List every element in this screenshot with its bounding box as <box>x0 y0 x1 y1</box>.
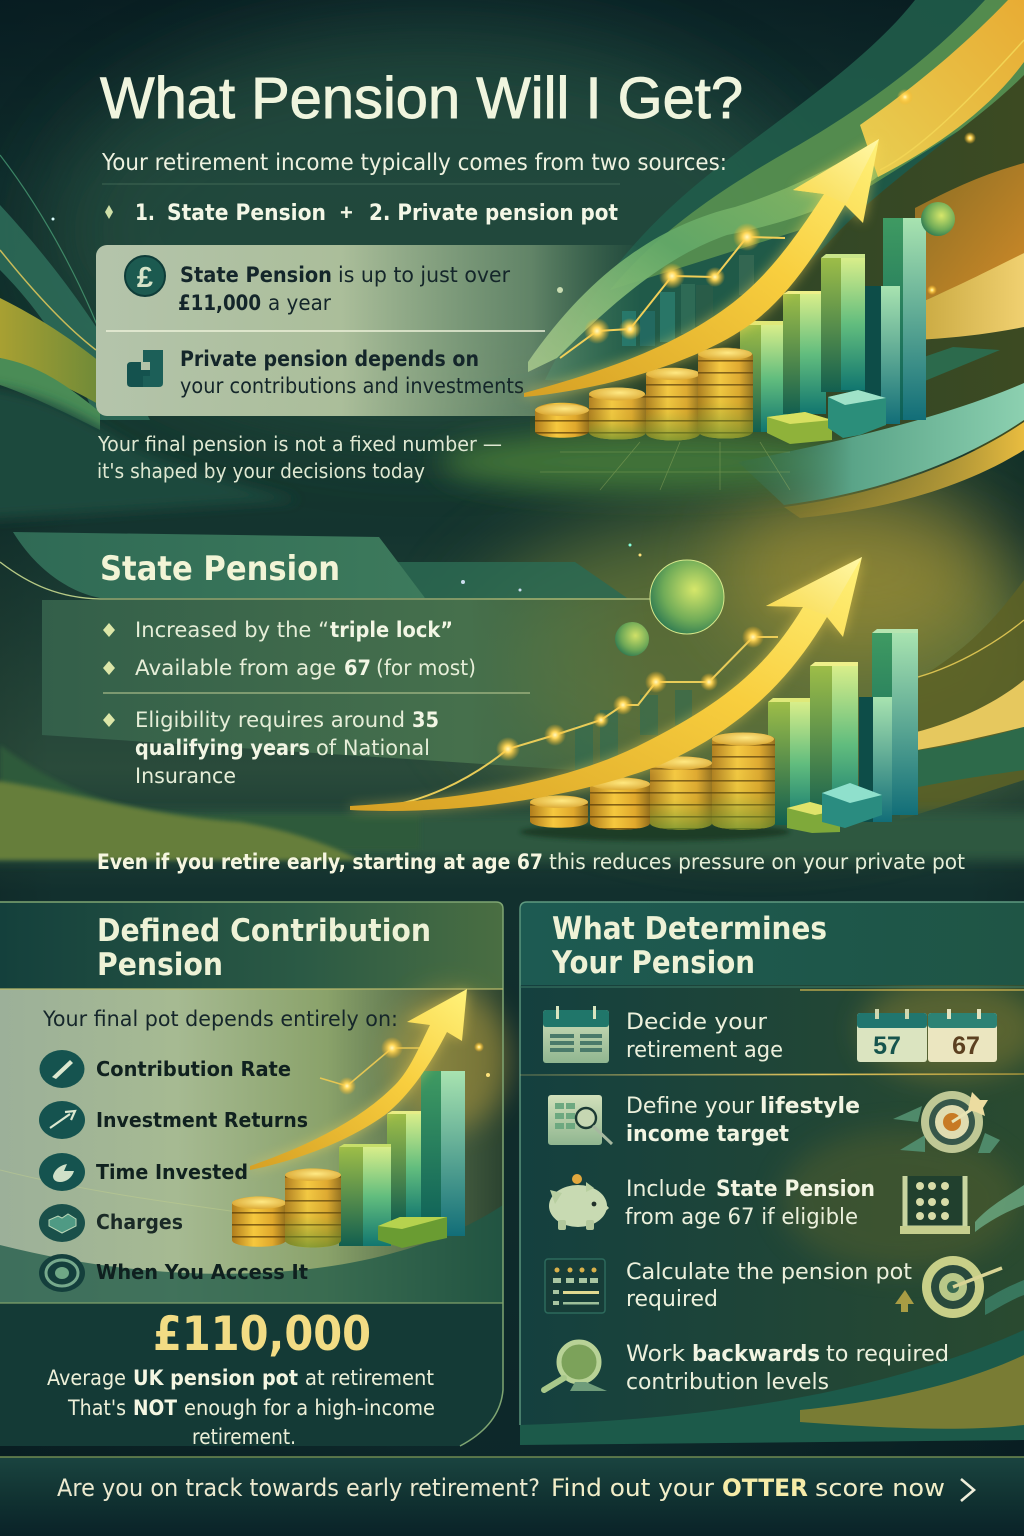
text: average pot explanation: enough for a high-income <box>184 1396 435 1420</box>
chart: defined contribution bars, coins and arrow <box>232 989 467 1248</box>
two sources line: + <box>340 200 353 225</box>
factor: when you access it: When You Access It <box>96 1260 308 1284</box>
chart: middle growth bars, coins and arrow <box>350 557 918 833</box>
footer call to action: Find out your <box>551 1474 714 1502</box>
icon: glass spheres <box>615 560 724 656</box>
icon: calculator grid <box>545 1259 605 1313</box>
row: pot required <box>545 1256 1024 1318</box>
row: work backwards <box>544 1342 949 1395</box>
row: state pension: from age 67 if eligible <box>625 1205 858 1230</box>
decorative waves: top section <box>0 0 1024 520</box>
row: lifestyle target: income target <box>626 1122 789 1147</box>
factor: contribution rate <box>40 1050 291 1088</box>
row: pot required: Calculate the pension pot <box>626 1260 912 1285</box>
text: state pension takeaway <box>97 850 965 874</box>
small sphere <box>921 202 955 236</box>
text: state pension takeaway: Even if you retire early, starting at age 67 <box>97 850 543 874</box>
icon: rising arrow <box>250 989 467 1170</box>
panel: defined contribution pension <box>0 902 510 1449</box>
icon: small background bars <box>622 255 754 346</box>
text: fixed number note <box>97 432 502 483</box>
row: state pension: Include <box>626 1177 706 1202</box>
two sources line: 1. <box>135 201 155 226</box>
text: state pension amount: State Pension <box>180 263 332 287</box>
footer call to action: Are you on track towards early retirement? <box>57 1474 540 1502</box>
text: fixed number note: it's shaped by your decisions today <box>97 459 425 483</box>
heading: Defined Contribution <box>97 913 431 949</box>
heading: What Determines <box>552 911 827 947</box>
icon: private pension pieces <box>127 350 163 387</box>
icon: age calendars 57 and 67: 67 <box>952 1032 980 1060</box>
row: work backwards: to required <box>826 1342 949 1367</box>
decorative sparkles <box>52 89 976 1077</box>
factor: investment returns: Investment Returns <box>96 1108 308 1132</box>
icon: abacus <box>900 1176 970 1234</box>
heading: State Pension <box>100 549 340 589</box>
footer call to action <box>0 1457 1024 1536</box>
bars <box>768 629 918 825</box>
row: lifestyle target: Define your <box>626 1094 755 1119</box>
coins <box>535 348 753 440</box>
text: average pot explanation <box>47 1366 435 1449</box>
heading <box>551 911 827 981</box>
icon: pound coin <box>125 256 165 296</box>
bars <box>740 218 926 432</box>
heading: Your Pension <box>551 945 755 981</box>
icon: age calendars 57 and 67 <box>857 1009 997 1062</box>
icon: piggy bank <box>549 1174 609 1230</box>
small background bars <box>575 690 692 775</box>
icon: pound coin: £ <box>137 262 153 294</box>
factor list <box>39 1050 308 1292</box>
text: private pension: your contributions and investments <box>180 374 524 398</box>
two sources line: State Pension <box>167 201 326 226</box>
stat: average pot: £110,000 <box>153 1307 371 1362</box>
coins <box>530 732 775 830</box>
text: private pension <box>180 347 524 398</box>
panel: what determines your pension <box>520 902 1024 1445</box>
row: retirement age: Decide your <box>626 1010 768 1035</box>
factor: charges: Charges <box>96 1210 183 1234</box>
icon: chevron <box>961 1479 974 1501</box>
panel: state pension <box>0 532 650 788</box>
text: state pension amount <box>178 263 510 315</box>
intro sentence: Your retirement income typically comes from two sources: <box>101 150 727 176</box>
heading <box>97 913 431 983</box>
bullets: Insurance <box>135 764 236 788</box>
icon: rising arrow <box>524 139 879 397</box>
bars <box>339 1071 465 1246</box>
bullets: 67 <box>344 656 371 680</box>
icon: calendar <box>543 1006 609 1063</box>
text: average pot explanation: That's <box>67 1396 126 1420</box>
row: lifestyle target: lifestyle <box>760 1094 860 1119</box>
line with points <box>320 1037 425 1095</box>
bullets <box>103 618 530 788</box>
bullets: triple lock” <box>330 618 453 642</box>
text: state pension amount: is up to just over <box>338 263 510 287</box>
cube <box>378 1217 447 1248</box>
text: average pot explanation: Average <box>47 1366 126 1390</box>
bullets: 35 <box>412 708 439 732</box>
text: state pension takeaway: this reduces pressure on your private pot <box>549 850 965 874</box>
row: retirement age: retirement age <box>626 1038 783 1063</box>
text: average pot explanation: retirement. <box>192 1425 296 1449</box>
bullets: (for most) <box>376 656 476 680</box>
icon: target with arrow <box>895 1256 1024 1318</box>
heading: Pension <box>97 947 223 983</box>
row: work backwards: contribution levels <box>626 1370 829 1395</box>
row: pot required: required <box>626 1287 718 1312</box>
line with glowing points <box>370 626 778 808</box>
row: lifestyle target <box>548 1091 1000 1153</box>
factor: time invested <box>39 1153 248 1191</box>
row: work backwards: Work <box>626 1342 685 1367</box>
row: state pension: State Pension <box>716 1177 875 1202</box>
bullets: Available from age <box>135 656 336 680</box>
icon: age calendars 57 and 67: 57 <box>873 1032 901 1060</box>
line with glowing points <box>560 223 785 358</box>
factor: time invested: Time Invested <box>96 1160 248 1184</box>
icon: magnifier <box>544 1342 607 1391</box>
text: average pot explanation: at retirement <box>305 1366 434 1390</box>
bullets: Increased by the “ <box>135 618 329 642</box>
two sources line: 2. Private pension pot <box>369 201 618 226</box>
factor: contribution rate: Contribution Rate <box>96 1057 291 1081</box>
footer call to action: score now <box>815 1474 945 1502</box>
two sources line <box>102 184 620 226</box>
bullets: Eligibility requires around <box>135 708 405 732</box>
factor: charges <box>39 1204 183 1242</box>
decorative waves: middle section <box>0 580 1024 860</box>
panel: two pension sources <box>96 245 641 416</box>
text: average pot explanation: NOT <box>133 1396 178 1420</box>
cubes <box>787 783 882 833</box>
chart: top growth bars, coins and arrow <box>524 139 955 444</box>
text: state pension amount: £11,000 <box>178 291 261 315</box>
icon: target with star <box>893 1091 1000 1153</box>
icon: rising arrow <box>350 557 862 811</box>
footer call to action: OTTER <box>722 1474 808 1502</box>
row: retirement age <box>543 1006 997 1063</box>
text: private pension: Private pension depends on <box>180 347 479 371</box>
cubes <box>767 390 886 444</box>
title: What Pension Will I Get? <box>100 66 743 131</box>
factor: when you access it <box>39 1254 308 1292</box>
intro: Your final pot depends entirely on: <box>42 1007 398 1031</box>
text: average pot explanation: UK pension pot <box>133 1366 298 1390</box>
coins <box>232 1168 341 1248</box>
text: state pension amount: a year <box>268 291 331 315</box>
factor: investment returns <box>39 1101 308 1139</box>
text: fixed number note: Your final pension is not a fixed number — <box>97 432 502 456</box>
bullets: of National <box>316 736 430 760</box>
row: state pension <box>549 1174 1024 1234</box>
row: work backwards: backwards <box>692 1342 820 1367</box>
bullets: qualifying years <box>135 736 310 760</box>
icon: sheet and magnifier <box>548 1095 612 1145</box>
